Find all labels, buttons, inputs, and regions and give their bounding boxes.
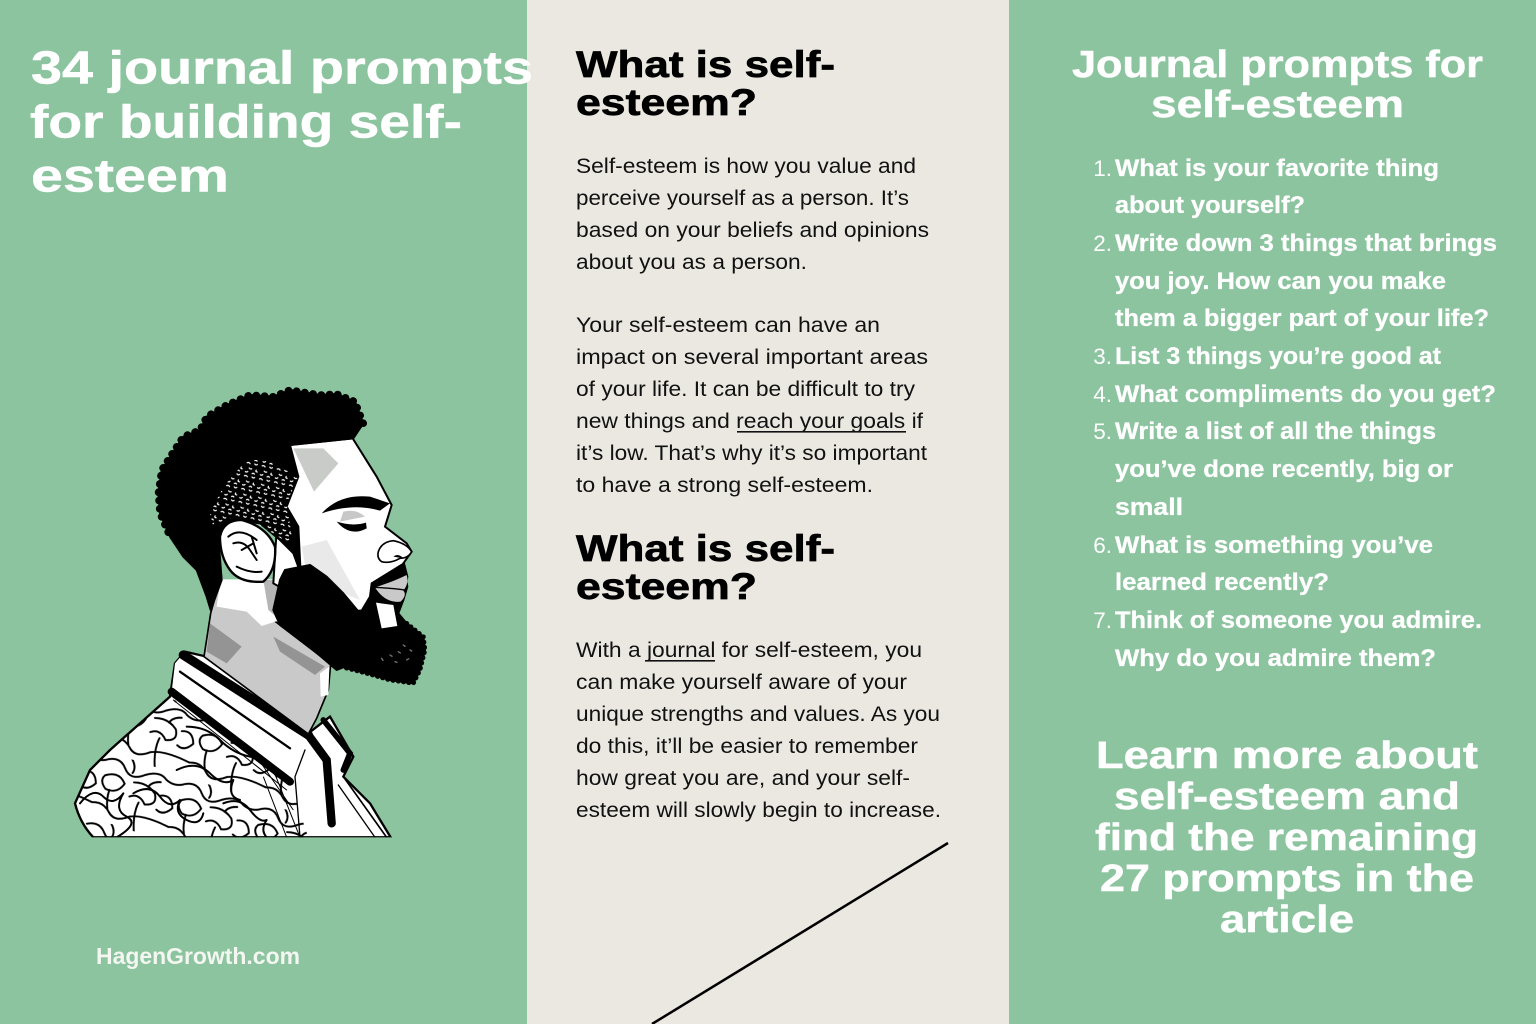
text block: impact: impact on several important areas	[576, 345, 928, 369]
prompt 1	[1093, 155, 1439, 219]
prompt 2: 2.	[1093, 231, 1112, 256]
panel: right green	[1009, 0, 1536, 1024]
heading: second what is self-esteem: What is self-	[576, 528, 835, 569]
prompt 4: What compliments do you get?	[1115, 381, 1496, 408]
panel: left green	[0, 0, 527, 1024]
prompt 7: Think of someone you admire.	[1115, 607, 1482, 634]
call to action	[1095, 735, 1478, 941]
text block: definition: perceive yourself as a person. It’s	[576, 186, 909, 210]
text block: definition: Self-esteem is how you value and	[576, 154, 916, 178]
heading: journal prompts: Journal prompts for	[1072, 44, 1483, 86]
heading: what is self-esteem: esteem?	[576, 82, 757, 123]
heading: second what is self-esteem: esteem?	[576, 566, 757, 607]
text block: journal: unique strengths and values. As you	[576, 702, 940, 726]
numbered prompt list	[1093, 155, 1497, 672]
text block: journal: how great you are, and your self-	[576, 766, 910, 790]
text block: journal	[576, 638, 941, 822]
prompt 4: 4.	[1093, 382, 1112, 407]
call to action: 27 prompts in the	[1100, 858, 1474, 900]
call to action: find the remaining	[1095, 817, 1478, 859]
prompt 5: Write a list of all the things	[1115, 418, 1436, 445]
heading: journal prompts: self-esteem	[1151, 84, 1404, 126]
text block: journal: can make yourself aware of your	[576, 670, 907, 694]
text block: definition	[576, 154, 929, 274]
title	[30, 42, 533, 202]
title: 34 journal prompts	[31, 42, 533, 94]
panel: middle beige	[527, 0, 1009, 1024]
ear	[220, 520, 275, 582]
shirt brain pattern	[78, 700, 308, 838]
face	[273, 438, 412, 628]
website credit: HagenGrowth.com	[96, 943, 300, 969]
prompt 6: What is something you’ve	[1115, 532, 1433, 559]
text block: journal: With a journal for self-esteem, you	[576, 638, 922, 662]
prompt 6: 6.	[1093, 533, 1112, 558]
text block: impact: new things and reach your goals if	[576, 409, 923, 433]
text block: definition: based on your beliefs and opinions	[576, 218, 929, 242]
prompt 6	[1093, 532, 1433, 596]
call to action: article	[1220, 899, 1354, 941]
nose	[378, 541, 412, 562]
prompt 5: small	[1115, 494, 1183, 521]
heading: journal prompts	[1072, 44, 1483, 126]
shirt base	[75, 652, 391, 837]
prompt 6: learned recently?	[1115, 569, 1329, 596]
prompt 2	[1093, 230, 1497, 332]
prompt 7: 7.	[1093, 608, 1112, 633]
prompt 5: 5.	[1093, 419, 1112, 444]
collar	[172, 658, 180, 688]
prompt 3: List 3 things you’re good at	[1115, 343, 1441, 370]
shirt placket stripes	[262, 765, 300, 838]
hair	[158, 390, 363, 610]
title: esteem	[31, 150, 229, 202]
curly hair texture	[210, 460, 298, 547]
text block: impact	[576, 313, 928, 497]
beard and moustache	[273, 563, 425, 683]
text block: journal: do this, it’ll be easier to remember	[576, 734, 918, 758]
text block: impact: it’s low. That’s why it’s so important	[576, 441, 927, 465]
prompt 3: 3.	[1093, 344, 1112, 369]
prompt 1: about yourself?	[1115, 192, 1305, 219]
heading: second what is self-esteem	[576, 528, 835, 607]
heading: what is self-esteem: What is self-	[576, 44, 835, 85]
heading: what is self-esteem	[576, 44, 835, 123]
prompt 5: you’ve done recently, big or	[1115, 456, 1453, 483]
title: for building self-	[30, 96, 462, 148]
text block: journal: esteem will slowly begin to increase.	[576, 798, 941, 822]
prompt 7	[1093, 607, 1482, 672]
prompt 1: What is your favorite thing	[1115, 155, 1439, 182]
call to action: Learn more about	[1096, 735, 1478, 777]
prompt 1: 1.	[1093, 156, 1112, 181]
prompt 2: you joy. How can you make	[1115, 268, 1446, 295]
diagonal line	[652, 843, 948, 1024]
neck	[204, 580, 331, 734]
call to action: self-esteem and	[1114, 776, 1460, 818]
text block: impact: Your self-esteem can have an	[576, 313, 880, 337]
prompt 2: them a bigger part of your life?	[1115, 305, 1489, 332]
eyebrow and closed eye	[322, 496, 390, 513]
text block: impact: to have a strong self-esteem.	[576, 473, 873, 497]
prompt 2: Write down 3 things that brings	[1115, 230, 1497, 257]
text block: definition: about you as a person.	[576, 250, 807, 274]
prompt 7: Why do you admire them?	[1115, 645, 1436, 672]
illustration: bearded man in profile	[60, 390, 425, 840]
lips and chin	[375, 575, 407, 602]
prompt 5	[1093, 418, 1453, 521]
text block: impact: of your life. It can be difficult to try	[576, 377, 915, 401]
